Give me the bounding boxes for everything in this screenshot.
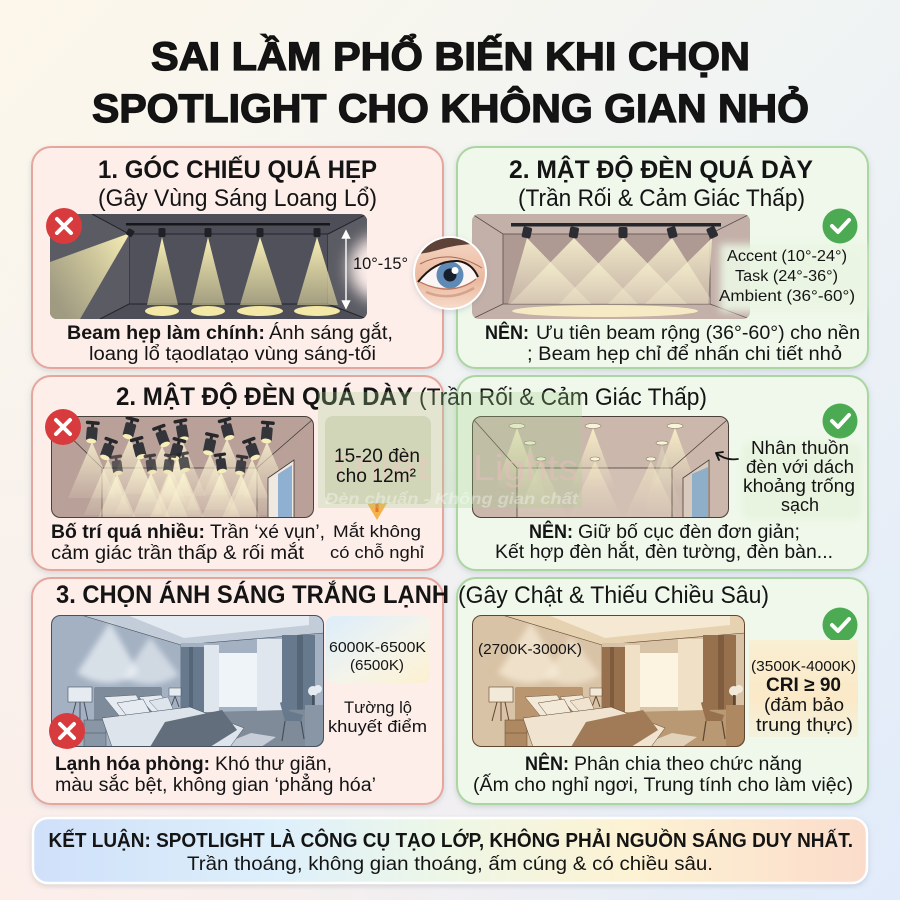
heading: row 2: (Trần Rối & Cảm Giác Thấp) — [419, 384, 707, 411]
callout: CRI — [749, 640, 858, 737]
description — [485, 322, 860, 365]
callout: CRI: CRI ≥ 90 — [766, 675, 841, 696]
callout: CRI: trung thực) — [756, 715, 853, 735]
arrow: to wall — [716, 452, 738, 460]
heading: 1. GÓC CHIẾU QUÁ HẸP — [98, 154, 377, 184]
subheading: (Gây Vùng Sáng Loang Lổ) — [98, 185, 377, 212]
description: Trần ‘xé vụn’, — [210, 522, 325, 543]
callout: wall flaws: khuyết điểm — [328, 717, 427, 736]
illustration: wide beams — [472, 214, 750, 319]
callout: wall flaws — [328, 698, 427, 736]
description: NÊN: — [529, 521, 573, 543]
callout: eye has no rest: có chỗ nghỉ — [330, 543, 424, 562]
icon: correct — [822, 608, 858, 642]
description — [55, 754, 376, 796]
conclusion: Trần thoáng, không gian thoáng, ấm cúng & có chiều sâu. — [187, 854, 713, 875]
arrow: height marker — [342, 231, 350, 308]
icon: correct — [822, 208, 858, 244]
heading: row 2 — [116, 381, 707, 411]
title: SPOTLIGHT CHO KHÔNG GIAN NHỎ — [92, 85, 809, 131]
description: Bố trí quá nhiều: — [51, 522, 205, 543]
panel: bố cục đèn đơn giản (đúng) — [457, 376, 868, 570]
callout: tip — [742, 438, 862, 520]
callout: lamp count: 15-20 đèn — [334, 446, 420, 467]
panel: góc chiếu quá hẹp (sai) — [32, 147, 443, 368]
callout: tip: Nhân thuồn — [751, 438, 849, 458]
description: Phân chia theo chức năng — [574, 754, 802, 775]
icon: wrong — [46, 208, 82, 244]
illustration: cold bedroom — [51, 615, 324, 747]
callout: colour temperature: (6500K) — [350, 657, 404, 674]
icon: warning — [367, 503, 387, 520]
callout: colour temperature — [326, 616, 430, 683]
callout: lamp count — [334, 446, 420, 487]
heading: row 2: 2. MẬT ĐỘ ĐÈN QUÁ DÀY — [116, 381, 413, 411]
heading: row 3 — [56, 579, 769, 609]
description: cảm giác trần thấp & rối mắt — [51, 542, 305, 564]
description: Ưu tiên beam rộng (36°-60°) cho nền — [536, 323, 860, 344]
callout: lamp count: cho 12m² — [336, 466, 416, 487]
description — [495, 521, 833, 563]
description: Beam hẹp làm chính: — [67, 323, 265, 344]
label: warm temperature: (2700K-3000K) — [478, 641, 582, 658]
description: NÊN: — [485, 322, 529, 344]
heading: row 3: (Gây Chật & Thiếu Chiều Sâu) — [458, 582, 769, 609]
watermark — [318, 392, 582, 508]
heading: row 3: 3. CHỌN ÁNH SÁNG TRẮNG LẠNH — [56, 579, 449, 609]
callout: eye has no rest — [330, 522, 424, 562]
panel: mật độ đèn / beam rộng (đúng) — [457, 147, 868, 368]
description — [51, 522, 325, 564]
title — [92, 32, 809, 131]
callout: eye has no rest: Mắt không — [333, 522, 421, 541]
icon: correct — [822, 404, 858, 438]
conclusion: KẾT LUẬN: SPOTLIGHT LÀ CÔNG CỤ TẠO LỚP, KHÔNG PHẢI NGUỒN SÁNG DUY NHẤT. — [48, 828, 853, 852]
panel: phân chia theo chức năng (đúng) — [457, 578, 868, 804]
illustration: narrow beams — [50, 214, 367, 319]
description: loang lổ tạodlatạo vùng sáng-tối — [89, 344, 376, 365]
callout: CRI: (đảm bảo — [764, 695, 844, 715]
watermark: Thiết — [325, 447, 430, 488]
icon: wrong — [45, 409, 81, 445]
description: Lạnh hóa phòng: — [55, 754, 210, 775]
illustration: warm bedroom — [472, 615, 745, 747]
legend: beam ranges: Accent (10°-24°) — [727, 248, 847, 265]
panel: đèn quá dày (sai) — [32, 376, 443, 570]
callout: wall flaws: Tường lộ — [344, 698, 412, 717]
description: màu sắc bệt, không gian ‘phẳng hóa’ — [55, 774, 376, 796]
callout: tip: sạch — [781, 495, 819, 515]
description — [473, 753, 853, 796]
panel: ánh sáng trắng lạnh (sai) — [32, 578, 443, 804]
watermark: Đèn chuẩn - Không gian chất — [325, 490, 579, 508]
description: Giữ bố cục đèn đơn giản; — [578, 522, 800, 543]
icon: wrong — [49, 713, 85, 749]
icon: eye — [413, 236, 487, 310]
description: (Ấm cho nghỉ ngơi, Trung tính cho làm việc) — [473, 774, 853, 796]
callout: tip: đèn với dách — [746, 457, 854, 477]
illustration: simple downlights — [472, 416, 729, 518]
conclusion — [33, 818, 867, 883]
callout: tip: khoảng trống — [743, 476, 855, 496]
description: NÊN: — [525, 753, 569, 775]
legend: beam ranges: Ambient (36°-60°) — [719, 288, 855, 305]
callout: CRI: (3500K-4000K) — [751, 658, 856, 675]
heading: 2. MẬT ĐỘ ĐÈN QUÁ DÀY — [509, 154, 813, 184]
description: Kết hợp đèn hắt, đèn tường, đèn bàn... — [495, 541, 833, 563]
description: ; Beam hẹp chỉ để nhấn chi tiết nhỏ — [527, 344, 842, 365]
callout background — [325, 416, 431, 504]
subheading: (Trần Rối & Cảm Giác Thấp) — [518, 185, 805, 212]
label: beam angle: 10°-15° — [353, 254, 408, 273]
title: SAI LẦM PHỔ BIẾN KHI CHỌN — [151, 32, 750, 79]
illustration: too many spotlights — [51, 416, 314, 518]
callout: colour temperature: 6000K-6500K — [329, 639, 426, 656]
watermark: Lights — [473, 447, 578, 488]
legend: beam ranges: Task (24°-36°) — [735, 268, 838, 285]
description: Khó thư giãn, — [215, 754, 332, 775]
description: Ánh sáng gắt, — [269, 322, 393, 344]
description — [67, 322, 393, 365]
legend: beam ranges — [719, 244, 866, 312]
